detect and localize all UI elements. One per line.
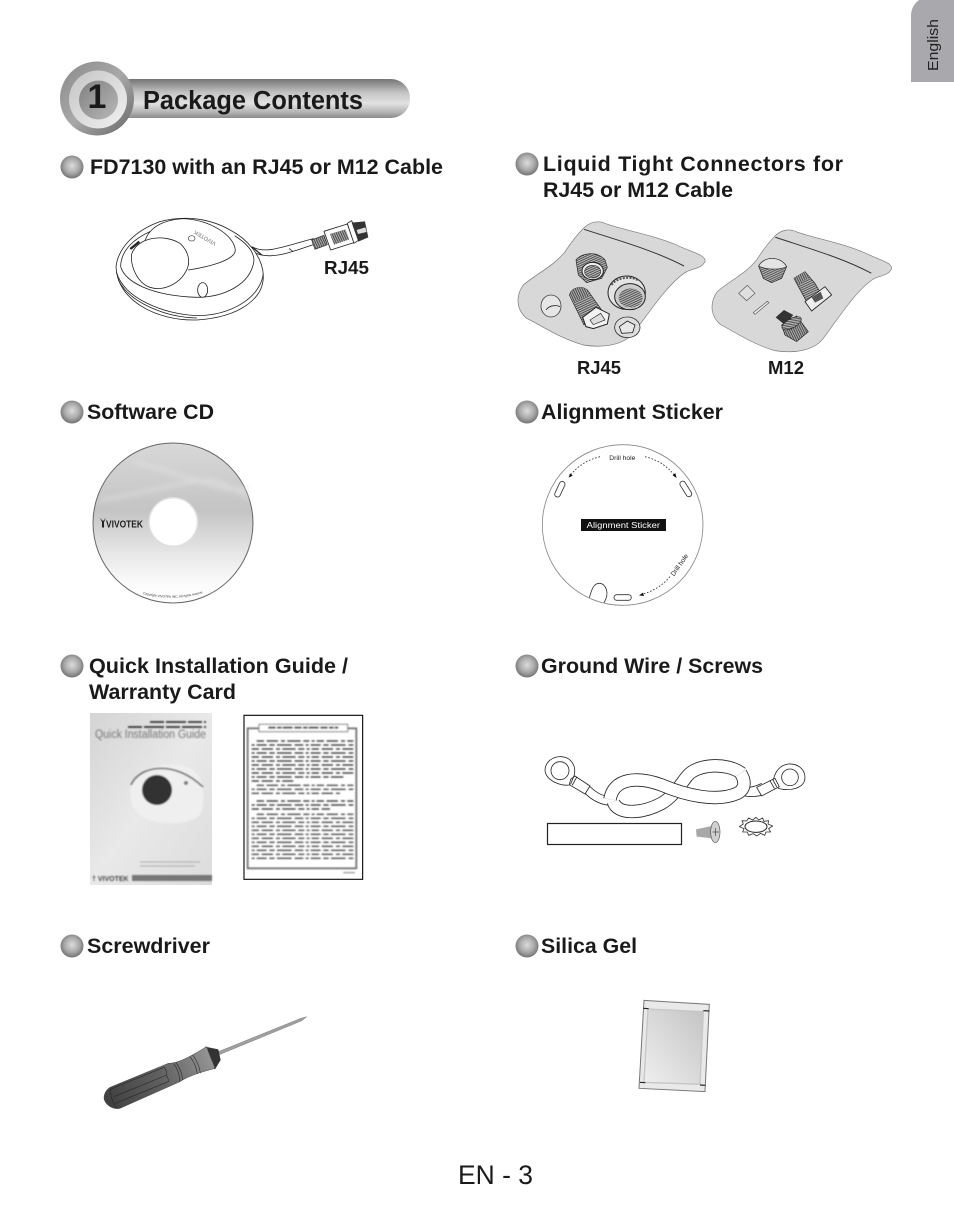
illustration: installation guide cover: Quick Installation Guide <box>95 729 206 741</box>
section header <box>60 62 410 136</box>
heading: screwdriver: Screwdriver <box>87 934 211 958</box>
heading: guide: Quick Installation Guide / <box>89 654 348 678</box>
illustration: sticker <box>542 445 703 605</box>
bullet <box>516 152 538 176</box>
illustration: dome camera: VIVOTEK <box>192 228 218 246</box>
label: M12: M12 <box>768 357 804 378</box>
illustration: CD: VIVOTEK <box>106 518 143 530</box>
label: RJ45: RJ45 <box>324 257 369 278</box>
heading: silica gel: Silica Gel <box>541 934 637 958</box>
illustration: sticker: Drill hole <box>609 455 636 462</box>
bullet <box>516 400 538 424</box>
icon: screw <box>696 821 720 843</box>
illustration: sticker: Drill hole <box>670 553 690 578</box>
bullet <box>60 156 84 178</box>
bullet <box>60 400 84 424</box>
heading: software CD: Software CD <box>87 400 214 424</box>
section title: Package Contents <box>143 87 363 115</box>
heading: camera: FD7130 with an RJ45 or M12 Cable <box>90 155 443 179</box>
panel: silica gel <box>516 934 709 1092</box>
language tab: English <box>925 19 942 71</box>
bullet <box>60 654 84 678</box>
heading: alignment sticker: Alignment Sticker <box>541 400 724 424</box>
heading: connectors: Liquid Tight Connectors for <box>543 152 844 176</box>
illustration: CD <box>92 442 254 604</box>
illustration: screwdriver <box>104 1017 307 1109</box>
panel: ground wire and screws <box>516 654 805 844</box>
panel: screwdriver <box>60 934 307 1109</box>
panel: guide and warranty card <box>60 654 363 885</box>
heading: ground wire: Ground Wire / Screws <box>541 654 763 678</box>
illustration: installation guide cover: † VIVOTEK <box>92 876 129 883</box>
icon: lock washer <box>739 817 773 836</box>
illustration: dome camera <box>116 218 368 320</box>
label: RJ45: RJ45 <box>577 357 621 378</box>
bullet <box>516 934 538 958</box>
number badge <box>60 62 134 136</box>
illustration: RJ45 connector bag <box>518 222 705 346</box>
panel: alignment sticker <box>516 400 724 605</box>
illustration: silica gel packet <box>639 1000 709 1092</box>
illustration: ground wire <box>545 757 805 811</box>
bullet <box>516 654 538 678</box>
panel: camera <box>60 155 443 320</box>
illustration: installation guide cover <box>90 713 212 885</box>
white label box <box>548 824 682 844</box>
heading: warranty card: Warranty Card <box>89 680 236 704</box>
number badge: 1 <box>88 78 106 116</box>
panel: software CD <box>60 400 254 604</box>
illustration: sticker: Alignment Sticker <box>587 520 660 530</box>
header bar <box>105 79 410 118</box>
heading: connectors line two: RJ45 or M12 Cable <box>543 178 733 202</box>
illustration: CD: Copyright VIVOTEK INC. All rights reserved <box>143 592 202 598</box>
panel: liquid tight connectors <box>516 152 892 378</box>
bullet <box>60 934 84 958</box>
language tab <box>911 0 954 82</box>
page number: EN - 3 <box>458 1160 533 1190</box>
illustration: warranty card <box>244 715 363 879</box>
illustration: M12 connector bag <box>712 230 892 352</box>
